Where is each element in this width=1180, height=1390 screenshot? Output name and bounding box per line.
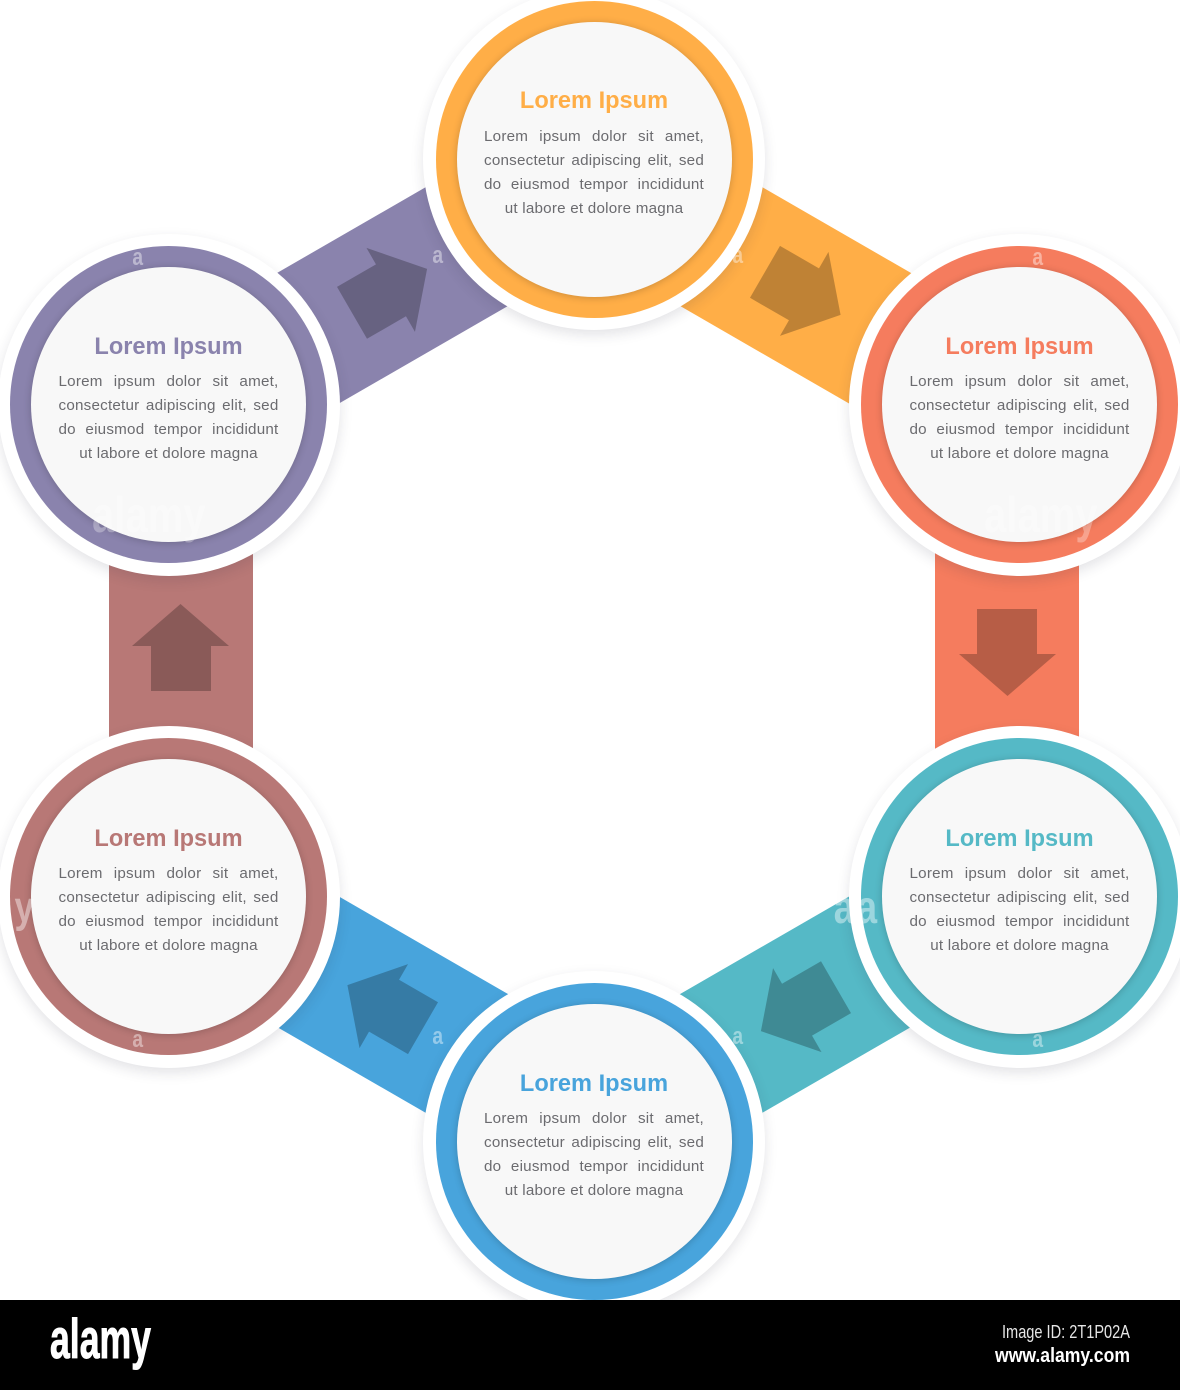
text block: teal: do eiusmod tempor incididunt	[910, 913, 1130, 930]
panel: upper right red circle	[846, 246, 1180, 584]
panel: lower left rose circle	[0, 726, 343, 1076]
watermark letters: alamy	[92, 487, 206, 543]
text block: blue: Lorem ipsum dolor sit amet,	[484, 1110, 704, 1127]
watermark letters: a	[432, 1023, 443, 1050]
text block: rose: consectetur adipiscing elit, sed	[58, 889, 278, 906]
footer bar	[0, 1300, 1180, 1390]
footer logo and image id: alamy	[50, 1307, 151, 1370]
watermark letters: a	[732, 242, 743, 269]
heading: blue: Lorem Ipsum	[520, 1070, 668, 1096]
band: blue connector with arrow	[138, 822, 637, 1193]
text block: rose	[58, 865, 278, 954]
panel: lower right teal circle	[846, 726, 1180, 1076]
text block: orange: Lorem ipsum dolor sit amet,	[484, 128, 704, 144]
text block: orange	[484, 128, 704, 216]
watermark letters: a	[132, 244, 143, 271]
text block: purple: ut labore et dolore magna	[79, 445, 258, 462]
text block: red: do eiusmod tempor incididunt	[910, 421, 1130, 438]
text block: orange: do eiusmod tempor incididunt	[484, 176, 704, 192]
heading: rose: Lorem Ipsum	[94, 826, 243, 852]
text block: rose: do eiusmod tempor incididunt	[58, 913, 278, 930]
text block: rose: Lorem ipsum dolor sit amet,	[58, 865, 278, 882]
heading: teal: Lorem Ipsum	[945, 826, 1094, 852]
text block: blue: ut labore et dolore magna	[505, 1182, 683, 1199]
text block: orange: consectetur adipiscing elit, sed	[484, 152, 704, 168]
watermark letters: a	[732, 1023, 743, 1050]
band: teal connector with arrow	[551, 822, 1050, 1193]
band: rose connector with arrow	[109, 404, 253, 896]
text block: red	[910, 373, 1130, 462]
footer logo and image id	[50, 1307, 1130, 1370]
band: purple connector with arrow	[138, 107, 637, 478]
text block: purple: Lorem ipsum dolor sit amet,	[58, 373, 278, 390]
panel: top orange circle	[420, 1, 768, 338]
watermark letters: y	[14, 883, 34, 932]
band: orange connector with arrow	[551, 107, 1050, 478]
text block: purple	[58, 373, 278, 462]
band: red connector with arrow	[935, 404, 1079, 896]
heading: red: Lorem Ipsum	[945, 334, 1094, 360]
heading: orange: Lorem Ipsum	[520, 88, 668, 114]
watermark letters: a	[1032, 244, 1043, 271]
text block: teal: ut labore et dolore magna	[930, 937, 1109, 954]
text block: purple: consectetur adipiscing elit, sed	[58, 397, 278, 414]
panel: upper left purple circle	[0, 246, 343, 582]
text block: orange: ut labore et dolore magna	[505, 200, 683, 216]
watermark letters: a	[1032, 1026, 1043, 1053]
text block: teal: consectetur adipiscing elit, sed	[910, 889, 1130, 906]
heading: purple: Lorem Ipsum	[94, 334, 243, 360]
footer logo and image id: Image ID: 2T1P02A	[1002, 1322, 1130, 1342]
watermark letters: alamy	[984, 487, 1098, 543]
text block: red: consectetur adipiscing elit, sed	[910, 397, 1130, 414]
watermark letters: aa	[834, 881, 879, 933]
text block: blue: consectetur adipiscing elit, sed	[484, 1134, 704, 1151]
panel: bottom blue circle	[420, 983, 768, 1300]
footer logo and image id: www.alamy.com	[994, 1345, 1130, 1367]
text block: purple: do eiusmod tempor incididunt	[58, 421, 278, 438]
text block: red: Lorem ipsum dolor sit amet,	[910, 373, 1130, 390]
text block: teal: Lorem ipsum dolor sit amet,	[910, 865, 1130, 882]
watermark letters: a	[132, 1026, 143, 1053]
text block: blue	[484, 1110, 704, 1199]
watermark letters: a	[432, 242, 443, 269]
text block: rose: ut labore et dolore magna	[79, 937, 258, 954]
text block: red: ut labore et dolore magna	[930, 445, 1109, 462]
text block: blue: do eiusmod tempor incididunt	[484, 1158, 704, 1175]
text block: teal	[910, 865, 1130, 954]
